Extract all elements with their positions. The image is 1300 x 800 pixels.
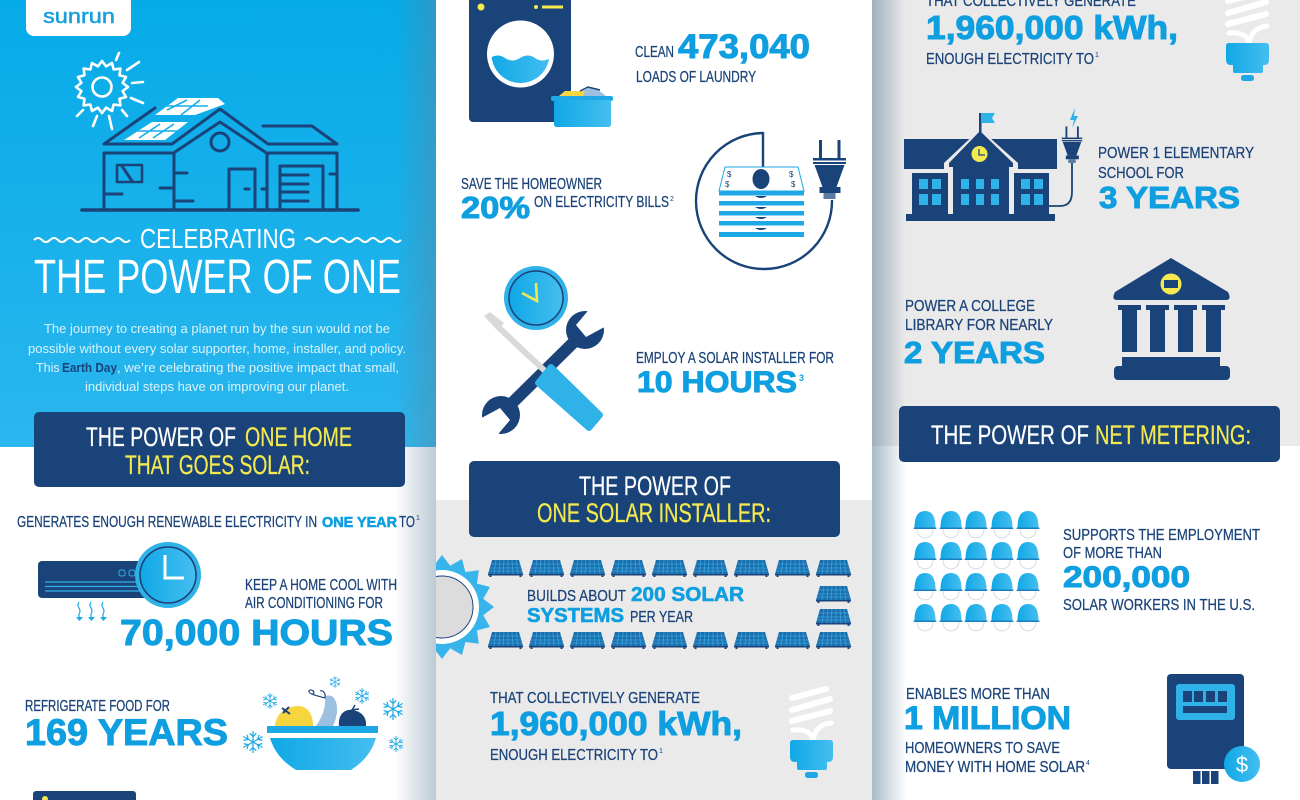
text: builds about 200 solar systems: 200 SOLAR — [631, 584, 745, 606]
heading: the power of one solar installer — [469, 461, 840, 537]
icon: money stack with plug: $ — [727, 170, 732, 179]
text: generates enough electricity: 1 — [416, 515, 420, 522]
text: keep a home cool: 70,000 HOURS — [120, 612, 393, 653]
text: power a college library — [904, 298, 1053, 370]
text: builds about 200 solar systems: BUILDS ABOUT — [527, 588, 626, 605]
text: refrigerate food: REFRIGERATE FOOD FOR — [25, 698, 170, 715]
text: power a college library: LIBRARY FOR NEARLY — [905, 317, 1053, 334]
heading: the power of one home: THAT GOES SOLAR: — [125, 450, 310, 480]
text: collectively generate, continued: ENOUGH ELECTRICITY TO — [926, 51, 1094, 68]
text: power elementary school: 3 YEARS — [1099, 180, 1240, 215]
text: supports employment: 200,000 — [1063, 561, 1190, 594]
text: enables more than one million: 4 — [1086, 760, 1090, 767]
icon: money stack with plug — [696, 132, 846, 269]
icon: light bulb, continued — [1226, 0, 1269, 81]
icon: house with solar panels — [82, 98, 358, 210]
text: supports employment: SOLAR WORKERS IN THE U.S. — [1063, 597, 1255, 614]
text: clean loads of laundry: LOADS OF LAUNDRY — [636, 69, 756, 86]
text: employ a solar installer: EMPLOY A SOLAR INSTALLER FOR — [636, 350, 834, 367]
text: enables more than one million — [904, 686, 1090, 776]
logo: sunrun — [26, 0, 131, 36]
text block: intro paragraph: individual steps have on improving our planet. — [85, 380, 349, 394]
text: builds about 200 solar systems: SYSTEMS — [527, 605, 624, 627]
icon: bowl of food with snowflakes — [243, 676, 403, 770]
icon: washing machine — [469, 0, 613, 127]
text: power elementary school: SCHOOL FOR — [1098, 165, 1184, 182]
text: builds about 200 solar systems — [527, 584, 745, 627]
text block: intro paragraph — [28, 322, 406, 394]
text block: intro paragraph: This — [36, 361, 60, 375]
text: power a college library: 2 YEARS — [904, 335, 1045, 370]
icon: money stack with plug: $ — [791, 180, 796, 189]
text: power elementary school: POWER 1 ELEMENTARY — [1098, 145, 1254, 162]
heading: the power of net metering: NET METERING: — [1095, 420, 1251, 450]
icon: clock, wrench and screwdriver — [476, 266, 610, 439]
icon: grid of hard hats — [914, 511, 1040, 631]
text: clean loads of laundry: CLEAN — [635, 44, 674, 61]
text: generates enough electricity: TO — [399, 514, 415, 531]
icon: money stack with plug: $ — [789, 170, 794, 179]
text: collectively generate — [490, 690, 742, 764]
icon: sun over house — [76, 53, 143, 129]
text block: intro paragraph: , we’re celebrating the positive impact that small, — [117, 361, 399, 375]
icon: partial card at bottom — [33, 791, 136, 800]
text: enables more than one million: ENABLES MORE THAN — [906, 686, 1050, 703]
text: supports employment: SUPPORTS THE EMPLOYMENT — [1063, 527, 1260, 544]
icon: light bulb — [790, 689, 833, 778]
text: collectively generate: 1,960,000 kWh, — [490, 705, 742, 742]
text: collectively generate: ENOUGH ELECTRICITY TO — [490, 747, 658, 764]
icon: school with plug — [904, 108, 1082, 221]
text: power a college library: POWER A COLLEGE — [905, 298, 1035, 315]
icon: large sun — [436, 555, 494, 659]
text: generates enough electricity: GENERATES ENOUGH RENEWABLE ELECTRICITY IN — [17, 514, 317, 531]
icon: library building — [1113, 258, 1230, 380]
text: save the homeowner: 20% — [461, 190, 530, 225]
text block: intro paragraph: The journey to creating a planet run by the sun would not be — [44, 322, 390, 336]
title: the power of one: THE POWER OF ONE — [34, 251, 401, 304]
text: builds about 200 solar systems: PER YEAR — [630, 609, 693, 626]
text: save the homeowner: 2 — [670, 196, 674, 203]
text block: intro paragraph: possible without every solar supporter, home, installer, and policy. — [28, 342, 406, 356]
heading: the power of one home: ONE HOME — [245, 422, 352, 452]
panel: right column background — [872, 0, 1300, 800]
text: refrigerate food: 169 YEARS — [25, 712, 228, 753]
text: collectively generate, continued: 1 — [1095, 52, 1099, 59]
heading: the power of one home: THE POWER OF — [86, 422, 236, 452]
panel: one home background — [0, 0, 436, 800]
text: keep a home cool: AIR CONDITIONING FOR — [245, 595, 383, 612]
heading: the power of one home — [34, 412, 405, 487]
icon: air conditioner with clock — [38, 542, 201, 621]
heading: the power of net metering: THE POWER OF — [931, 420, 1089, 450]
text: keep a home cool — [120, 577, 397, 653]
text: collectively generate, continued: 1,960,000 kWh, — [926, 9, 1178, 46]
decorative wave right — [305, 238, 401, 242]
text: keep a home cool: KEEP A HOME COOL WITH — [245, 577, 397, 594]
text: generates enough electricity: ONE YEAR — [322, 514, 397, 531]
icon: money stack with plug: $ — [725, 180, 730, 189]
heading: the power of net metering — [899, 406, 1280, 462]
heading: the power of one solar installer: THE POWER OF — [579, 471, 731, 501]
heading: the power of one solar installer: ONE SOLAR INSTALLER: — [537, 498, 771, 528]
text: enables more than one million: 1 MILLION — [904, 700, 1071, 736]
text: enables more than one million: MONEY WITH HOME SOLAR — [905, 759, 1085, 776]
text: employ a solar installer: 3 — [799, 373, 804, 383]
text: collectively generate: 1 — [659, 748, 663, 755]
text: save the homeowner — [461, 176, 674, 225]
text: enables more than one million: HOMEOWNERS TO SAVE — [905, 740, 1060, 757]
text: clean loads of laundry — [635, 28, 810, 86]
panel: middle column background — [436, 0, 872, 800]
text: supports employment — [1063, 527, 1260, 614]
text: save the homeowner: ON ELECTRICITY BILLS — [534, 194, 669, 211]
text: employ a solar installer — [636, 350, 834, 399]
icon: electric meter with dollar: $ — [1236, 752, 1248, 777]
text: power elementary school — [1098, 145, 1254, 215]
decorative wave left — [34, 238, 130, 242]
text: save the homeowner: SAVE THE HOMEOWNER — [461, 176, 602, 193]
text: collectively generate: THAT COLLECTIVELY GENERATE — [490, 690, 700, 707]
icon: electric meter with dollar — [1167, 674, 1260, 784]
text block: intro paragraph: Earth Day — [62, 361, 117, 375]
title: celebrating: CELEBRATING — [140, 223, 296, 254]
logo: sunrun: sunrun — [43, 6, 115, 28]
text: employ a solar installer: 10 HOURS — [637, 366, 797, 399]
text: collectively generate, continued — [926, 0, 1178, 68]
text: clean loads of laundry: 473,040 — [678, 28, 810, 66]
text: supports employment: OF MORE THAN — [1063, 545, 1162, 562]
icon: grid of solar panels — [488, 560, 851, 649]
